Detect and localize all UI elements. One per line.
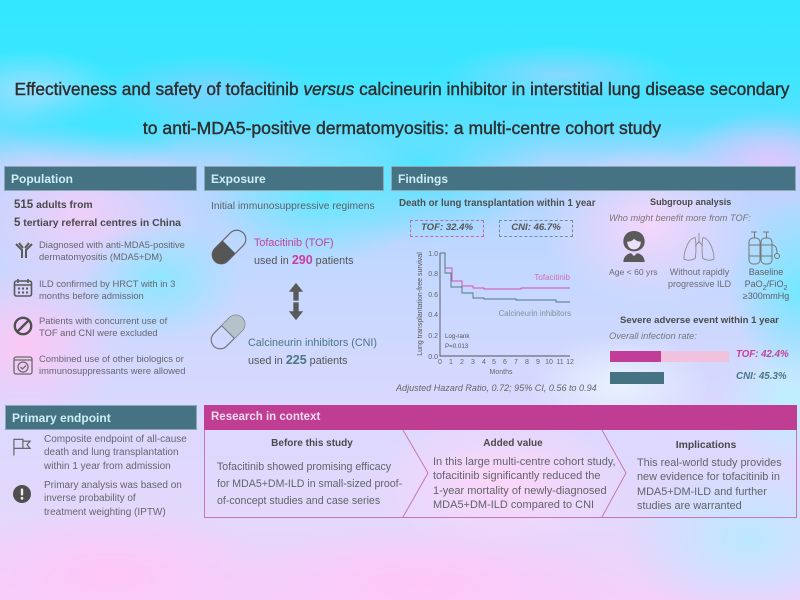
criterion: allowed: immunosuppressants were allowed (39, 365, 185, 376)
subgroup: non-progressive: Without rapidly (670, 267, 729, 277)
findings heading (391, 166, 796, 191)
survival chart: 7 (514, 359, 518, 366)
survival chart: Lung transplantation-free survival (417, 252, 424, 356)
icon: oxygen tanks (748, 232, 780, 264)
icon: calendar (14, 279, 32, 297)
icon: flag (13, 438, 32, 456)
survival chart: 0.0 (428, 354, 438, 361)
survival chart: 6 (503, 359, 507, 366)
title: Effectiveness and safety of tofacitinib versus calcineurin inhibitor in interstitial lung disease secondary (15, 79, 789, 99)
added value (433, 438, 616, 511)
TOF result: TOF: 32.4% (421, 222, 473, 233)
added value heading: Added value (483, 438, 543, 449)
primary endpoint heading (5, 405, 197, 430)
subgroup: baseline oxygen: Baseline (749, 267, 783, 277)
subgroup question: Who might benefit more from TOF: (609, 213, 751, 223)
survival chart: Calcineurin inhibitors (499, 309, 571, 318)
implications heading: Implications (676, 440, 736, 451)
survival chart: 0.4 (428, 312, 438, 319)
population size: 5 tertiary referral centres in China (14, 217, 181, 229)
icon: tofacitinib capsule (212, 230, 246, 264)
icon: exclamation (13, 485, 31, 503)
CNI label: Calcineurin inhibitors (CNI) (248, 337, 377, 349)
survival chart: Months (490, 369, 513, 376)
exposure heading (204, 166, 384, 191)
criterion: ILD confirmed (39, 278, 175, 301)
survival chart: 2 (460, 359, 464, 366)
endpoint definition: within 1 year from admission (44, 461, 171, 472)
criterion: allowed: Combined use of other biologics or (39, 353, 184, 364)
CNI label (248, 337, 377, 367)
mortality heading: Death or lung transplantation within 1 year (399, 198, 595, 209)
TOF infection rate: TOF: 42.4% (736, 349, 789, 360)
survival chart: 8 (525, 359, 529, 366)
panel: findings (391, 166, 796, 393)
criterion: excluded: TOF and CNI were excluded (39, 327, 158, 338)
panel: primary endpoint (5, 405, 197, 518)
survival chart: 3 (471, 359, 475, 366)
subgroup: baseline oxygen (742, 267, 789, 301)
survival chart: P=0.013 (445, 343, 469, 350)
icon: CNI capsule (210, 314, 246, 350)
population heading: Population (11, 172, 73, 186)
survival chart: 0.2 (428, 333, 438, 340)
before text (217, 461, 402, 507)
survival chart (416, 251, 574, 376)
CNI infection rate: CNI: 45.3% (736, 371, 787, 382)
CNI result (499, 220, 573, 237)
criterion: excluded: Patients with concurrent use of (39, 315, 167, 326)
endpoint definition: death and lung transplantation (44, 447, 179, 458)
added value text: tofacitinib significantly reduced the (433, 470, 601, 482)
implications text: MDA5+DM-ILD and further (637, 486, 767, 498)
before heading: Before this study (271, 438, 353, 449)
CNI label: used in 225 patients (248, 353, 348, 367)
survival chart: 1 (449, 359, 453, 366)
survival chart: 4 (482, 359, 486, 366)
before text: of-concept studies and case series (217, 495, 380, 507)
panel: population (4, 166, 197, 376)
subgroup heading: Subgroup analysis (650, 197, 731, 207)
tofacitinib label: used in 290 patients (254, 253, 354, 267)
survival chart: Tofacitinib (534, 273, 571, 282)
criterion: ILD confirmed: ILD confirmed by HRCT with in 3 (39, 278, 175, 289)
analysis note (44, 480, 182, 518)
criterion: excluded (39, 315, 168, 338)
icon: lungs (684, 233, 714, 261)
adjusted hazard ratio: Adjusted Hazard Ratio, 0.72; 95% CI, 0.56 to 0.94 (396, 383, 597, 393)
title (15, 79, 790, 138)
tofacitinib label: Tofacitinib (TOF) (254, 237, 334, 249)
subgroup: non-progressive: progressive ILD (668, 279, 731, 289)
analysis note: treatment weighting (IPTW) (44, 507, 166, 518)
implications text: studies are warranted (637, 500, 742, 512)
icon: antibody (15, 242, 33, 258)
icon: checked calendar (13, 356, 33, 375)
icon: person (623, 231, 645, 262)
bar: TOF (610, 351, 729, 362)
survival chart: 0.6 (428, 292, 438, 299)
analysis note: Primary analysis was based on (44, 480, 182, 491)
analysis note: inverse probability of (44, 493, 136, 504)
survival chart: 0 (438, 359, 442, 366)
findings heading: Findings (398, 172, 448, 186)
criterion: diagnosis (39, 239, 185, 262)
adverse event heading: Severe adverse event within 1 year (620, 315, 779, 326)
icon: prohibited (14, 316, 32, 336)
subgroup: non-progressive (668, 267, 731, 289)
added value text (433, 456, 616, 511)
implications text: This real-world study provides (637, 457, 782, 469)
TOF result (410, 220, 484, 237)
bar: CNI (610, 372, 664, 384)
survival chart: 10 (545, 359, 553, 366)
title: to anti-MDA5-positive dermatomyositis: a multi-centre cohort study (143, 118, 661, 138)
exposure subtitle: Initial immunosuppressive regimens (211, 201, 375, 212)
added value text: MDA5+DM-ILD compared to CNI (433, 499, 594, 511)
survival chart: Log-rank (445, 333, 470, 340)
before this study (217, 438, 402, 507)
CNI result: CNI: 46.7% (511, 222, 561, 233)
criterion: ILD confirmed: months before admission (39, 290, 144, 301)
population size (14, 199, 181, 229)
added value text: 1-year mortality of newly-diagnosed (433, 485, 607, 497)
population heading (4, 166, 197, 191)
survival chart: 11 (556, 359, 564, 366)
subgroup: age: Age < 60 yrs (609, 267, 658, 277)
survival chart: 9 (536, 359, 540, 366)
subgroup: baseline oxygen: PaO2/FiO2 (745, 279, 787, 292)
population size: 515 adults from (14, 199, 93, 211)
implications text (637, 457, 782, 512)
survival chart: 1.0 (428, 251, 438, 258)
survival chart: 5 (492, 359, 496, 366)
survival chart: 12 (566, 359, 574, 366)
tofacitinib label (254, 237, 354, 267)
primary endpoint heading: Primary endpoint (12, 411, 111, 425)
endpoint definition: Composite endpoint of all-cause (44, 434, 187, 445)
subgroup: baseline oxygen: ≥300mmHg (743, 291, 789, 301)
panel: exposure (204, 166, 384, 367)
implications text: new evidence for tofacitinib in (637, 471, 780, 483)
research heading (204, 405, 797, 430)
criterion: diagnosis: dermatomyositis (MDA5+DM) (39, 251, 162, 262)
adverse event subtitle: Overall infection rate: (609, 331, 697, 341)
panel: research in context (204, 405, 797, 518)
research heading: Research in context (211, 411, 320, 423)
before text: Tofacitinib showed promising efficacy (217, 461, 391, 473)
endpoint definition (44, 434, 187, 472)
chevron dividers and frame (204, 430, 797, 518)
survival chart: 0.8 (428, 271, 438, 278)
arrow: comparison (289, 283, 303, 320)
implications (637, 440, 782, 512)
criterion: allowed (39, 353, 185, 376)
before text: for MDA5+DM-ILD in small-sized proof- (217, 478, 402, 490)
exposure heading: Exposure (211, 172, 266, 186)
added value text: In this large multi-centre cohort study, (433, 456, 616, 468)
criterion: diagnosis: Diagnosed with anti-MDA5-positive (39, 239, 185, 250)
